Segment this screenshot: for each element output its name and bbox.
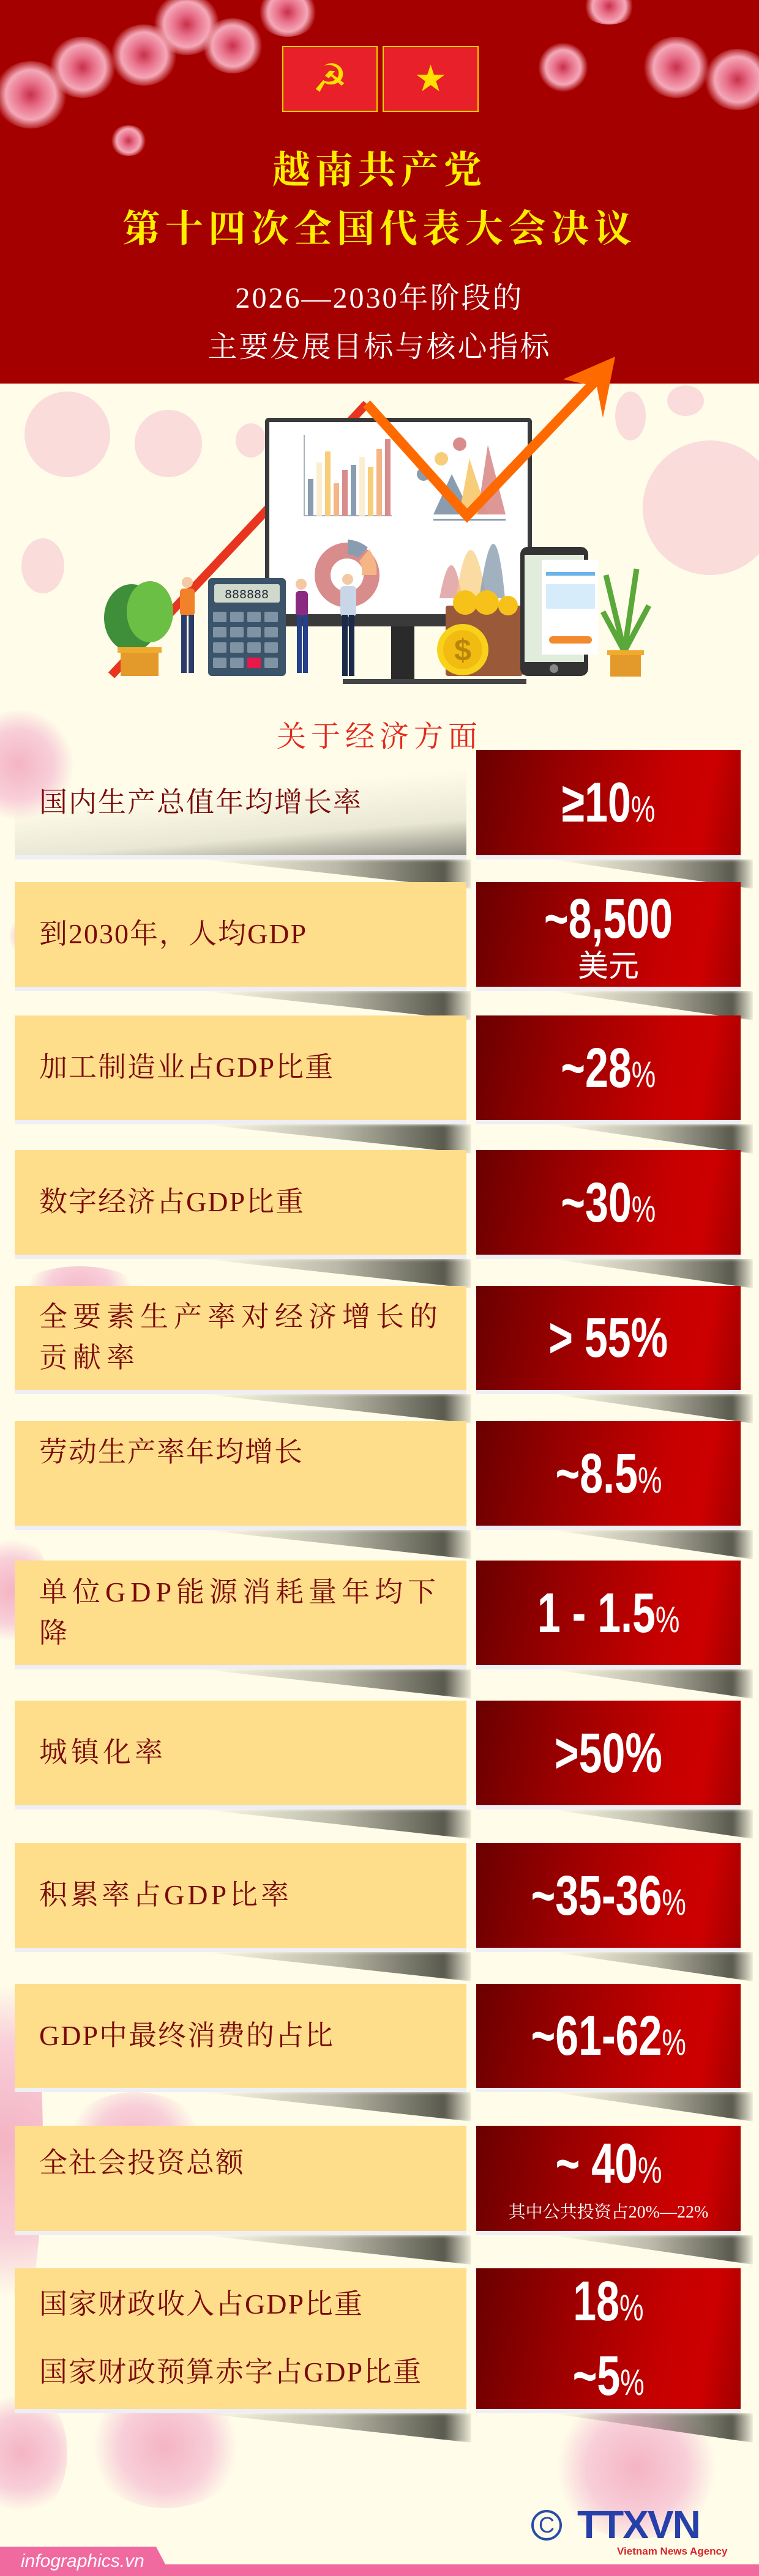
value: ~30%	[561, 1171, 656, 1233]
value: ≥10%	[562, 771, 655, 834]
value	[476, 1421, 741, 1526]
calculator	[208, 578, 286, 676]
label	[15, 1015, 466, 1120]
flag: party: ☭	[312, 56, 348, 102]
value	[476, 1701, 741, 1805]
value	[476, 882, 741, 987]
person left	[180, 577, 195, 673]
label	[15, 1421, 466, 1526]
label: 到2030年，人均GDP	[39, 918, 307, 949]
flag: Vietnam: ★	[414, 58, 447, 100]
wallet and coins	[437, 590, 523, 676]
people middle	[296, 574, 356, 676]
label: 劳动生产率年均增长	[39, 1436, 304, 1468]
blossoms background	[21, 385, 759, 593]
subtitle: 2026—2030年阶段的	[235, 282, 524, 314]
decorative blossoms header	[0, 61, 67, 128]
value	[476, 2126, 741, 2231]
label: 国家财政收入占GDP比重	[39, 2288, 364, 2320]
label: 积累率占GDP比率	[39, 1879, 292, 1910]
value: > 55%	[549, 1307, 668, 1369]
footer bar	[0, 2547, 759, 2576]
footer source text: infographics.vn	[21, 2551, 144, 2571]
donut chart	[323, 540, 376, 599]
area chart	[439, 544, 505, 598]
value	[476, 1561, 741, 1665]
label	[15, 1561, 466, 1665]
value	[476, 1984, 741, 2088]
label	[15, 2268, 466, 2409]
illustration: economy dashboard	[21, 357, 759, 684]
label: GDP中最终消费的占比	[39, 2020, 334, 2051]
value: 18%	[573, 2270, 644, 2333]
plant left	[104, 581, 173, 676]
label	[15, 1701, 466, 1805]
subtitle	[208, 282, 551, 363]
label	[15, 1150, 466, 1255]
logo: TTXVN: C	[539, 2512, 555, 2537]
label	[15, 1286, 466, 1390]
logo: TTXVN: Vietnam News Agency	[617, 2545, 727, 2557]
title: 越南共产党	[272, 139, 487, 194]
header band	[0, 0, 759, 384]
subtitle: 主要发展目标与核心指标	[208, 331, 551, 363]
value	[476, 1843, 741, 1948]
value: 1 - 1.5%	[537, 1582, 679, 1644]
value: ~ 40%	[555, 2132, 662, 2195]
row 5: TFP	[15, 1286, 753, 1423]
wallet and coins: $	[454, 633, 471, 667]
value: >50%	[555, 1721, 662, 1784]
flag: party	[282, 46, 378, 112]
value: ~8,500	[544, 887, 673, 949]
plant right	[603, 569, 649, 677]
footer source text	[0, 2547, 165, 2570]
section heading: 关于经济方面	[277, 713, 482, 755]
value: ~5%	[572, 2345, 645, 2407]
label	[15, 1843, 466, 1948]
label: 加工制造业占GDP比重	[39, 1052, 334, 1083]
label	[15, 1984, 466, 2088]
row 3: processing manufacturing	[15, 1015, 753, 1154]
row 4: digital economy	[15, 1150, 753, 1288]
value: 美元	[578, 941, 639, 985]
row 10: final consumption	[15, 1984, 753, 2121]
calculator: 888888	[225, 588, 269, 603]
value	[476, 750, 741, 855]
row 8: urbanization	[15, 1701, 753, 1839]
phone	[520, 547, 598, 676]
label: 全社会投资总额	[39, 2147, 245, 2178]
value: ~35-36%	[531, 1865, 686, 1927]
label	[15, 2126, 466, 2231]
row 9: accumulation rate	[15, 1843, 753, 1981]
label: 国家财政预算赤字占GDP比重	[39, 2356, 422, 2388]
label	[15, 882, 466, 987]
row 1: GDP growth	[15, 750, 753, 888]
label: 单位GDP能源消耗量年均下降	[39, 1576, 441, 1648]
label: 数字经济占GDP比重	[39, 1186, 305, 1217]
title: 第十四次全国代表大会决议	[122, 198, 637, 253]
title	[122, 139, 637, 253]
logo: TTXVN: TTXVN	[577, 2503, 700, 2547]
logo: TTXVN	[531, 2503, 727, 2557]
side blossoms decoration	[0, 710, 73, 820]
value	[476, 1150, 741, 1255]
label: 国内生产总值年均增长率	[39, 787, 362, 818]
triangle chart	[417, 437, 506, 521]
row 2: GDP per capita	[15, 882, 753, 1020]
label: 城镇化率	[39, 1737, 166, 1768]
orange arrow	[367, 370, 606, 516]
value: 其中公共投资占20%—22%	[509, 2203, 708, 2222]
value	[476, 2268, 741, 2409]
row 6: labour productivity	[15, 1421, 753, 1559]
monitor	[265, 418, 532, 684]
flag: Vietnam	[383, 46, 479, 112]
value: ~8.5%	[555, 1442, 662, 1505]
red arrow line	[111, 404, 367, 675]
value	[476, 1015, 741, 1120]
bar chart	[304, 435, 392, 516]
row 7: energy intensity	[15, 1561, 753, 1698]
value: ~28%	[561, 1036, 656, 1099]
value: ~61-62%	[531, 2005, 686, 2067]
row 11: total social investment	[15, 2126, 753, 2265]
label: 全要素生产率对经济增长的贡献率	[39, 1301, 443, 1373]
row 12: state budget	[15, 2268, 753, 2442]
value	[476, 1286, 741, 1390]
